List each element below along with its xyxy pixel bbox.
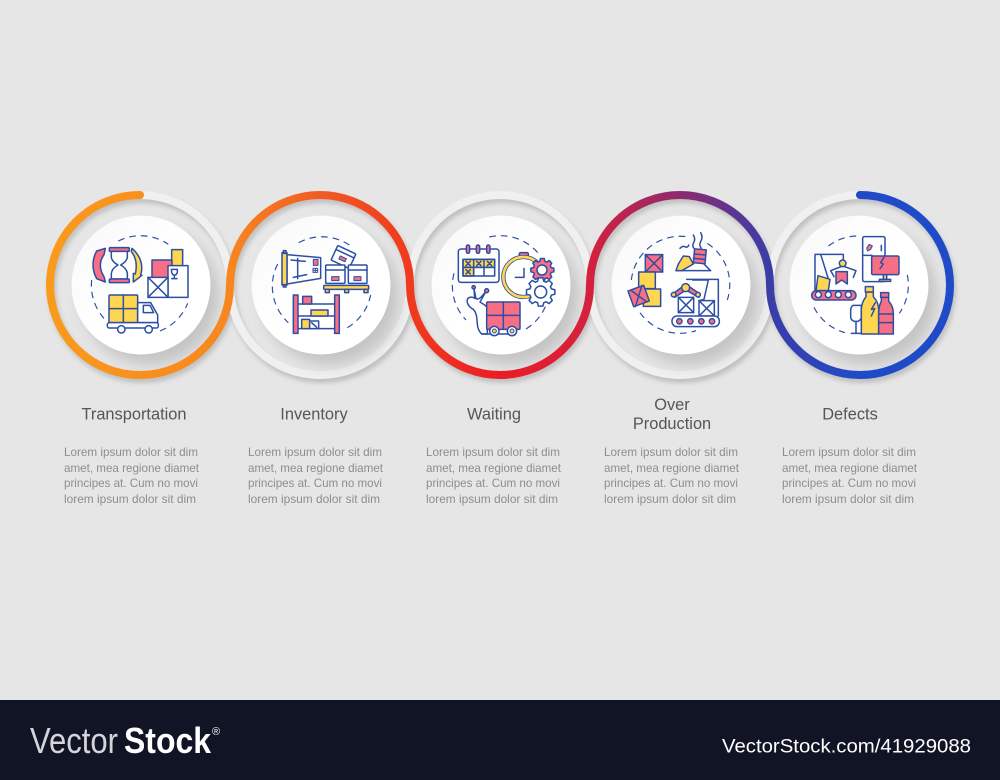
footer logo xyxy=(30,720,220,761)
text block: Waiting: amet, mea regione diamet xyxy=(426,461,562,475)
text block: Transportation: amet, mea regione diamet xyxy=(64,461,200,475)
text block: Defects: amet, mea regione diamet xyxy=(782,461,918,475)
text block: Waiting: lorem ipsum dolor sit dim xyxy=(426,492,558,506)
white disc shadows xyxy=(81,227,937,365)
footer band xyxy=(0,700,1000,780)
text block: Over Production: Lorem ipsum dolor sit dim xyxy=(604,445,738,459)
icon: over production xyxy=(628,233,730,333)
heading: Waiting: Waiting xyxy=(467,406,521,424)
text block: Transportation: lorem ipsum dolor sit dim xyxy=(64,492,196,506)
footer logo: Stock xyxy=(124,720,212,761)
white discs xyxy=(72,216,928,354)
text block: Transportation: principes at. Cum no movi xyxy=(64,476,198,490)
text block: Waiting: Lorem ipsum dolor sit dim xyxy=(426,445,560,459)
icon: defects xyxy=(812,236,908,334)
text block: Over Production: amet, mea regione diamet xyxy=(604,461,740,475)
text block: Over Production xyxy=(604,445,740,506)
text block: Defects: principes at. Cum no movi xyxy=(782,476,916,490)
text block: Transportation xyxy=(64,445,200,506)
text block: Waiting: principes at. Cum no movi xyxy=(426,476,560,490)
ring shadows xyxy=(52,199,952,379)
text block: Over Production: principes at. Cum no movi xyxy=(604,476,738,490)
footer logo: ® xyxy=(212,726,220,738)
heading: Inventory: Inventory xyxy=(280,406,349,424)
text block: Inventory: principes at. Cum no movi xyxy=(248,476,382,490)
heading: Over Production: Production xyxy=(633,415,711,433)
icon: inventory xyxy=(272,237,371,333)
text block: Inventory: lorem ipsum dolor sit dim xyxy=(248,492,380,506)
light track arcs xyxy=(140,195,860,375)
text block: Inventory: amet, mea regione diamet xyxy=(248,461,384,475)
gradient ribbon xyxy=(50,195,950,375)
text block: Defects xyxy=(782,445,918,506)
text block: Transportation: Lorem ipsum dolor sit dim xyxy=(64,445,198,459)
text block: Over Production: lorem ipsum dolor sit dim xyxy=(604,492,736,506)
text block: Waiting xyxy=(426,445,562,506)
footer image id: VectorStock.com/41929088 xyxy=(722,736,971,758)
footer logo: Vector xyxy=(30,720,118,761)
icon: transportation xyxy=(91,236,188,333)
text block: Inventory xyxy=(248,445,384,506)
text block: Inventory: Lorem ipsum dolor sit dim xyxy=(248,445,382,459)
text block: Defects: lorem ipsum dolor sit dim xyxy=(782,492,914,506)
heading: Defects: Defects xyxy=(822,406,878,424)
heading: Transportation: Transportation xyxy=(81,406,187,424)
icon: waiting xyxy=(452,236,555,336)
text block: Defects: Lorem ipsum dolor sit dim xyxy=(782,445,916,459)
heading: Over Production: Over xyxy=(654,396,690,414)
